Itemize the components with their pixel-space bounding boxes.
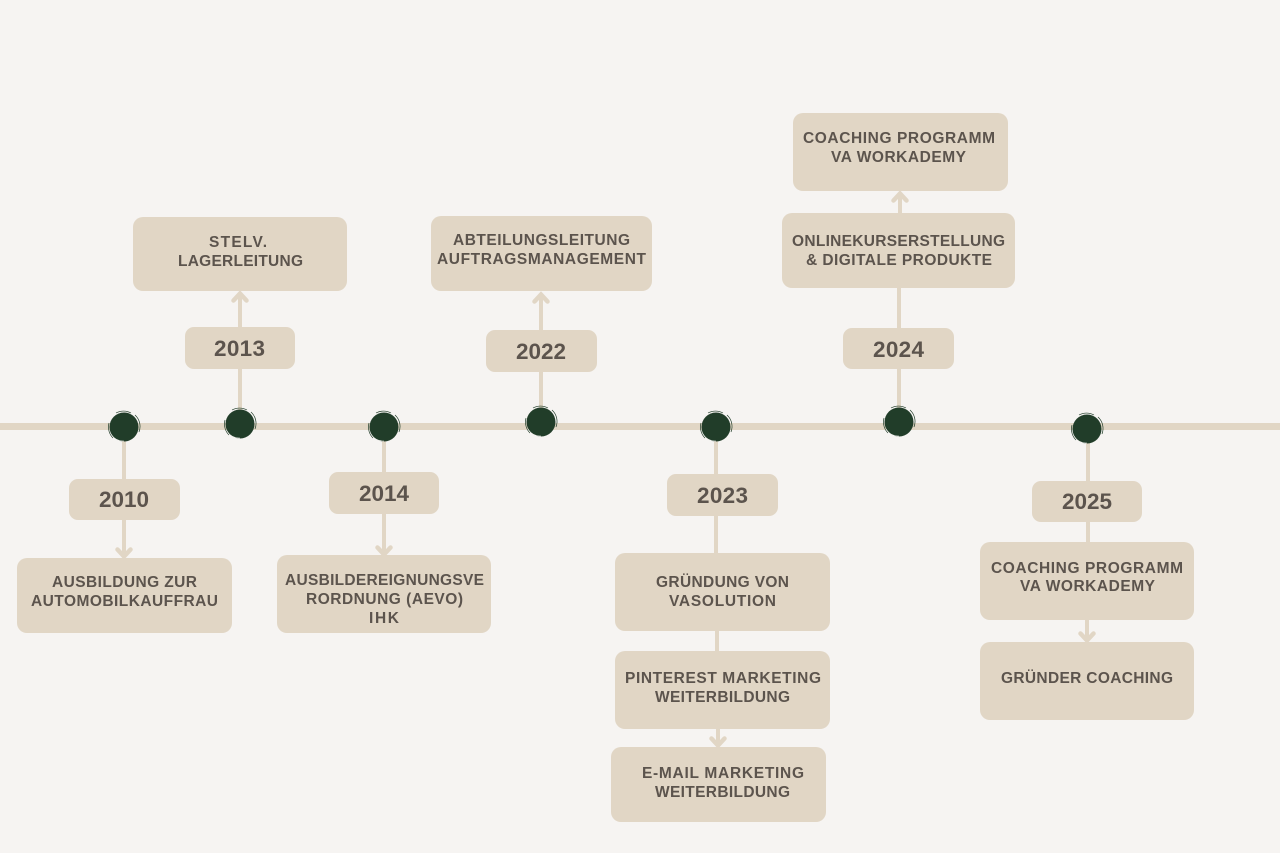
connector arrow 2010	[118, 427, 130, 556]
year label 2010: 2010	[99, 487, 149, 512]
milestone 2024	[782, 113, 1015, 436]
box: E-Mail	[611, 747, 826, 822]
box: Coaching Programm	[793, 113, 1008, 191]
box: Ausbildung: AUSBILDUNG ZUR	[52, 574, 197, 591]
dot 2023	[700, 411, 732, 442]
milestone 2013	[133, 217, 347, 438]
dot 2010	[108, 411, 140, 442]
milestone 2014	[277, 411, 491, 633]
year label 2014	[329, 472, 439, 514]
box: Pinterest: PINTEREST MARKETING	[625, 670, 821, 687]
box: Pinterest	[615, 651, 830, 729]
dot 2013	[224, 408, 256, 438]
year label 2010	[69, 479, 180, 520]
year label 2024: 2024	[873, 337, 924, 362]
connector 2025	[1086, 429, 1090, 542]
connector 2023	[716, 427, 717, 651]
year label 2014: 2014	[359, 481, 409, 506]
milestone 2025	[980, 413, 1194, 720]
connector arrow 2013	[234, 294, 246, 424]
year label 2022	[486, 330, 597, 372]
box: Gründung	[615, 553, 830, 631]
box: Onlinekurse: & DIGITALE PRODUKTE	[806, 252, 992, 269]
milestone 2010	[17, 411, 232, 633]
box: Abteilungsleitung: AUFTRAGSMANAGEMENT	[437, 251, 647, 268]
box: Pinterest: WEITERBILDUNG	[655, 689, 790, 706]
connector arrow 2014	[378, 427, 390, 554]
box: AEVO: AUSBILDEREIGNUNGSVE	[285, 572, 484, 589]
milestone 2023	[611, 411, 830, 822]
box: Lagerleitung: STELV.	[209, 234, 267, 251]
box: AEVO	[277, 555, 491, 633]
milestone 2022	[431, 216, 652, 436]
year label 2013	[185, 327, 295, 369]
box: Abteilungsleitung: ABTEILUNGSLEITUNG	[453, 232, 630, 249]
box: Gründung: VASOLUTION	[669, 593, 776, 610]
year label 2023: 2023	[697, 483, 748, 508]
year label 2013: 2013	[214, 336, 265, 361]
year label 2025	[1032, 481, 1142, 522]
box: AEVO: IHK	[369, 610, 400, 627]
box: Onlinekurse: ONLINEKURSERSTELLUNG	[792, 233, 1005, 250]
box: Gründung: GRÜNDUNG VON	[656, 574, 789, 591]
box: E-Mail: WEITERBILDUNG	[655, 784, 790, 801]
dot 2025	[1071, 413, 1103, 444]
connector arrow 2022	[534, 294, 548, 422]
box: Lagerleitung	[133, 217, 347, 291]
box: Onlinekurse	[782, 213, 1015, 288]
dot 2024	[883, 406, 915, 436]
year label 2023	[667, 474, 778, 516]
dot 2022	[525, 406, 557, 436]
box: Coaching Programm: VA WORKADEMY	[831, 149, 967, 166]
box: Gründer Coaching	[980, 642, 1194, 720]
box: Coaching Programm 2025	[980, 542, 1194, 620]
box: Ausbildung: AUTOMOBILKAUFFRAU	[31, 593, 218, 610]
box: Ausbildung	[17, 558, 232, 633]
horizontal timeline bar	[0, 423, 1280, 430]
box: AEVO: RORDNUNG (AEVO)	[306, 591, 463, 608]
dot 2014	[368, 411, 400, 442]
connector 2024	[897, 288, 901, 422]
year label 2022: 2022	[516, 339, 566, 364]
box: E-Mail: E-MAIL MARKETING	[642, 765, 804, 782]
box: Coaching Programm 2025: VA WORKADEMY	[1020, 578, 1156, 595]
box: Abteilungsleitung	[431, 216, 652, 291]
box: Lagerleitung: LAGERLEITUNG	[178, 253, 303, 270]
arrow to Gründer Coaching	[1080, 620, 1094, 641]
box: Coaching Programm 2025: COACHING PROGRAMM	[991, 560, 1183, 577]
arrow to Coaching Programm	[894, 194, 906, 213]
year label 2025: 2025	[1062, 489, 1112, 514]
box: Coaching Programm: COACHING PROGRAMM	[803, 130, 995, 147]
arrow to E-Mail Marketing	[712, 729, 724, 746]
box: Gründer Coaching: GRÜNDER COACHING	[1001, 670, 1173, 687]
year label 2024	[843, 328, 954, 369]
